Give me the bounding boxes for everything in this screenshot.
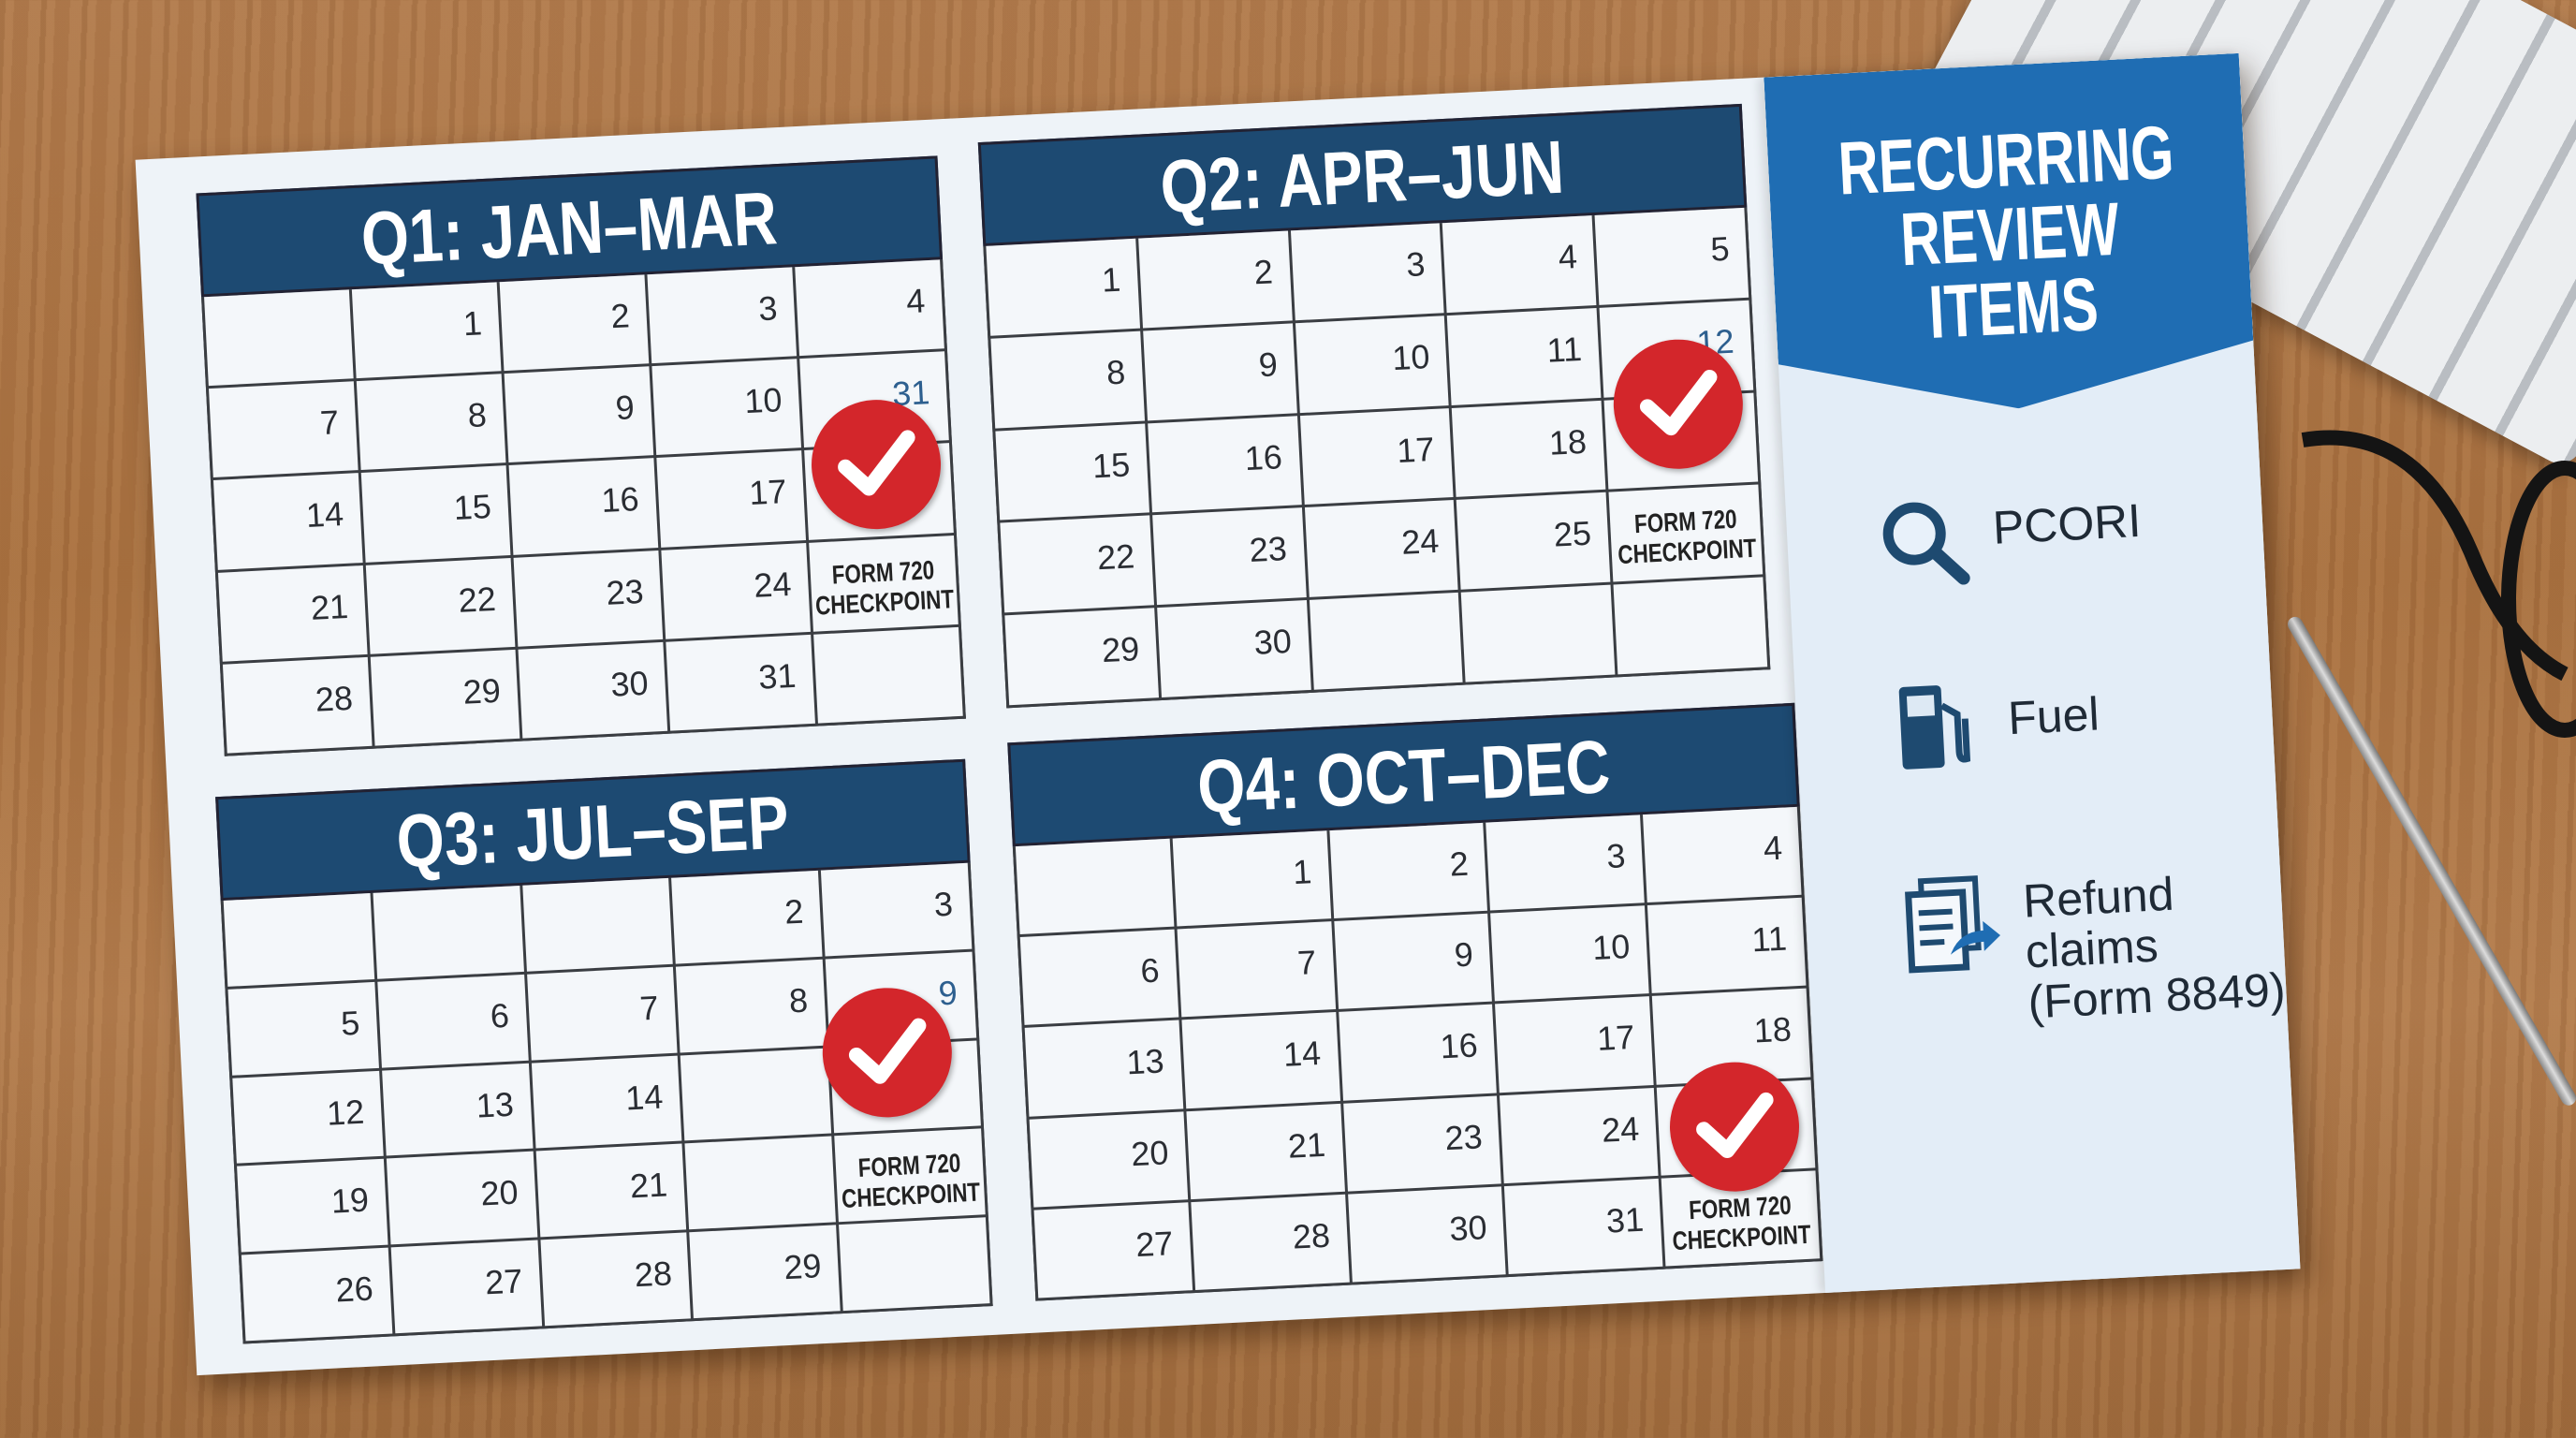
calendar: Q2: 9: [1258, 345, 1279, 384]
calendar: Q4: 3: [1605, 836, 1626, 875]
calendar: Q2: 15: [1091, 445, 1131, 485]
calendar: Q4: 2: [1449, 844, 1470, 884]
calendar: Q3: 27: [484, 1262, 523, 1302]
calendar: Q2: 3: [1405, 244, 1426, 284]
calendar: Q3: 8: [788, 980, 809, 1020]
calendar: Q1: 16: [601, 479, 640, 520]
calendar: Q1: CHECKPOINT: [814, 584, 955, 620]
calendar: Q2: 5: [1709, 229, 1731, 269]
calendar: Q2: 1: [1101, 260, 1121, 300]
calendar: Q4: 10: [1591, 927, 1631, 967]
calendar: Q1: 21: [310, 586, 349, 626]
calendar: Q2: FORM 720: [1633, 505, 1737, 539]
calendar: Q2: 22: [1096, 537, 1135, 578]
heading: Q2: [978, 104, 1747, 246]
calendar: Q3: 29: [783, 1246, 822, 1286]
heading: Q3: Q3: JUL–SEP: [395, 780, 791, 883]
calendar: Q2: 12: [1695, 321, 1735, 361]
icon: check: [1667, 1059, 1803, 1195]
calendar: Q1: 9: [615, 388, 636, 427]
calendar: Q2: 18: [1548, 421, 1588, 462]
calendar: Q1: 4: [905, 281, 926, 320]
calendar: Q1: 30: [609, 664, 650, 704]
calendar: Q4: FORM 720: [1688, 1190, 1792, 1225]
calendar: Q2: 30: [1253, 622, 1293, 662]
calendar: Q1: 28: [315, 679, 354, 719]
icon: refund document: [1905, 875, 2000, 974]
calendar: Q1: 1: [462, 303, 483, 343]
heading: Q1: [196, 155, 943, 297]
text: refund claims: Refund: [2022, 868, 2175, 928]
calendar: Q3: FORM 720: [857, 1149, 961, 1182]
calendar: Q1: 31: [891, 373, 930, 413]
heading: Q2: Q2: APR–JUN: [1159, 125, 1566, 228]
calendar: Q2: 8: [1105, 352, 1126, 391]
calendar: Q4: 24: [1601, 1108, 1640, 1149]
calendar: Q1: 8: [467, 395, 488, 434]
calendar: Q3: 6: [490, 996, 510, 1035]
calendar: Q4: 9: [1454, 935, 1474, 975]
text: refund claims: claims: [2025, 919, 2159, 978]
calendar: Q4: [1007, 702, 1823, 1301]
banner: recurring review items: ITEMS: [1927, 262, 2100, 354]
calendar: Q4: 6: [1139, 951, 1161, 990]
calendar: Q3: 12: [326, 1092, 365, 1132]
calendar: Q1: 15: [453, 487, 492, 527]
calendar: Q1: 3: [757, 288, 778, 328]
calendar: Q2: 17: [1396, 430, 1435, 470]
calendar: Q2: 24: [1400, 521, 1440, 562]
calendar: Q1: 17: [748, 472, 787, 512]
calendar: Q1: 7: [319, 403, 340, 442]
text: Fuel: Fuel: [2007, 687, 2100, 744]
calendar: Q4: 11: [1751, 919, 1788, 960]
calendar: Q4: 13: [1125, 1042, 1164, 1082]
calendar: Q3: 13: [476, 1084, 515, 1124]
calendar: Q1: 24: [753, 564, 792, 604]
calendar: Q2: 4: [1558, 237, 1578, 276]
calendar: Q4: 4: [1763, 829, 1783, 868]
calendar: Q2: 16: [1244, 437, 1283, 477]
calendar: Q2: 11: [1546, 330, 1583, 369]
calendar: Q3: 21: [629, 1166, 668, 1206]
icon: check: [809, 396, 944, 532]
calendar: Q3: 26: [335, 1269, 374, 1310]
icon: fuel pump: [1898, 685, 1971, 770]
calendar: Q3: 3: [933, 885, 954, 924]
calendar: Q3: 28: [634, 1254, 673, 1294]
calendar: Q3: 14: [624, 1077, 664, 1117]
calendar: Q3: 5: [340, 1004, 360, 1043]
calendar: Q1: 14: [305, 494, 344, 535]
calendar: Q1: 22: [458, 579, 497, 619]
keyboard: [1908, 0, 2576, 471]
banner: recurring review items: [1764, 53, 2256, 420]
calendar: Q2: 23: [1249, 529, 1288, 569]
calendar: Q2: [977, 103, 1771, 708]
heading: Q3: [215, 759, 971, 901]
calendar: Q4: 23: [1444, 1117, 1484, 1157]
calendar: Q3: CHECKPOINT: [841, 1178, 981, 1213]
calendar: Q4: 27: [1134, 1224, 1174, 1264]
calendar: Q1: 23: [606, 571, 645, 611]
calendar: Q3: [215, 758, 993, 1344]
heading: Q1: Q1: JAN–MAR: [359, 176, 780, 281]
calendar: Q4: 18: [1753, 1010, 1793, 1050]
pen: [2285, 614, 2576, 1108]
calendar: Q3: 9: [938, 973, 959, 1012]
text: refund claims: (Form 8849): [2027, 963, 2287, 1029]
calendar: Q4: 31: [1605, 1199, 1645, 1240]
calendar: Q2: 2: [1253, 252, 1274, 291]
calendar: Q4: 28: [1292, 1215, 1331, 1255]
banner: recurring review items: RECURRING: [1837, 110, 2175, 211]
calendar: Q4: 14: [1282, 1034, 1322, 1074]
calendar: Q1: 31: [757, 656, 797, 697]
calendar: Q4: 7: [1296, 943, 1317, 982]
calendar: Q4: 17: [1596, 1018, 1635, 1058]
calendar: Q4: 16: [1440, 1026, 1479, 1066]
calendar: Q1: FORM 720: [831, 555, 935, 589]
calendar: Q4: 20: [1130, 1133, 1169, 1173]
calendar: Q4: 1: [1292, 852, 1312, 891]
text: PCORI: PCORI: [1992, 494, 2143, 554]
panel: sidebar: [1764, 53, 2300, 1293]
calendar: Q3: 2: [783, 892, 804, 932]
calendar: Q3: 19: [330, 1181, 370, 1221]
calendar: Q1: 10: [743, 380, 783, 420]
calendar: Q4: 30: [1448, 1208, 1487, 1248]
calendar: Q4: 21: [1287, 1124, 1326, 1165]
paper: [136, 53, 2300, 1375]
icon: check: [820, 985, 956, 1121]
icon: check: [1610, 337, 1746, 472]
calendar: Q4: CHECKPOINT: [1672, 1219, 1811, 1255]
icon: magnifier: [1883, 502, 1970, 584]
calendar: Q1: [196, 155, 966, 756]
heading: Q4: Q4: OCT–DEC: [1195, 725, 1612, 829]
calendar: Q2: 10: [1391, 337, 1430, 377]
heading: Q4: [1007, 703, 1800, 846]
glasses: [2301, 431, 2576, 738]
text: refund claims: [2022, 868, 2287, 1029]
calendar: Q3: 7: [638, 988, 659, 1027]
calendar: Q3: 20: [479, 1173, 519, 1213]
banner: recurring review items: REVIEW: [1898, 187, 2121, 281]
calendar: Q1: 29: [462, 671, 502, 712]
calendar: Q2: 29: [1101, 629, 1140, 669]
calendar: Q1: 2: [610, 296, 631, 335]
calendar: Q2: 25: [1553, 514, 1592, 554]
calendar: Q2: CHECKPOINT: [1617, 534, 1757, 570]
